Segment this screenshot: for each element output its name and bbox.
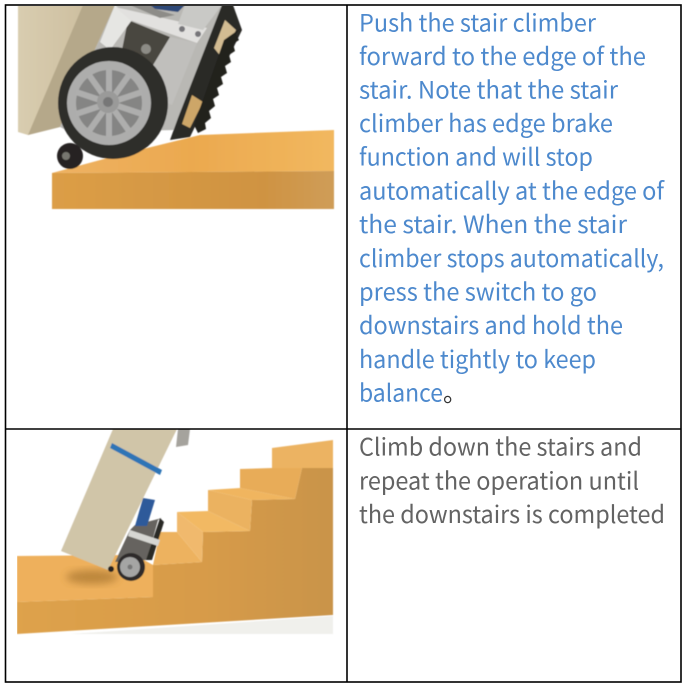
cardboard box	[61, 429, 177, 570]
image: stair climber descending the stairs	[17, 429, 333, 634]
text block: push to stair edge: automatically at the edge of	[359, 172, 665, 206]
climber frame	[115, 429, 190, 562]
large wheel	[58, 47, 168, 159]
text block: push to stair edge: forward to the edge of the	[359, 37, 646, 72]
cardboard box	[18, 5, 115, 135]
text block: push to stair edge: climber stops automatically,	[359, 239, 664, 274]
text block: climb down the stairs: repeat the operation until	[359, 462, 639, 496]
steps	[153, 440, 333, 565]
text block: push to stair edge: the stair. When the stair	[359, 205, 628, 240]
text block: climb down the stairs: Climb down the stairs and	[359, 428, 642, 462]
landing	[17, 555, 153, 602]
staircase body	[17, 468, 333, 634]
stair front face	[52, 171, 334, 209]
text block: push to stair edge: balance	[359, 374, 443, 408]
floor reflection	[70, 616, 333, 634]
text block: push to stair edge: climber has edge brake	[359, 104, 613, 139]
image: stair climber at stair edge	[18, 5, 334, 209]
text block: push to stair edge: stair. Note that the stair	[359, 70, 619, 106]
stair top surface	[52, 130, 334, 173]
text block: push to stair edge: Push the stair climber	[359, 4, 597, 38]
blue strap	[110, 443, 162, 475]
text block: push to stair edge	[359, 4, 665, 408]
small caster wheel	[57, 143, 83, 169]
text block: push to stair edge: downstairs and hold the	[359, 306, 623, 341]
shadow under climber	[66, 570, 118, 584]
text block: push to stair edge: 。	[443, 374, 467, 408]
metal frame	[60, 5, 225, 132]
text block: climb down the stairs: the downstairs is completed	[359, 495, 665, 530]
text block: push to stair edge: function and will stop	[359, 138, 593, 173]
text block: push to stair edge: press the switch to go	[359, 272, 597, 308]
rubber track	[170, 5, 242, 140]
text block: climb down the stairs	[359, 428, 665, 530]
wheel	[108, 553, 145, 581]
text block: push to stair edge: handle tightly to keep	[359, 340, 596, 375]
